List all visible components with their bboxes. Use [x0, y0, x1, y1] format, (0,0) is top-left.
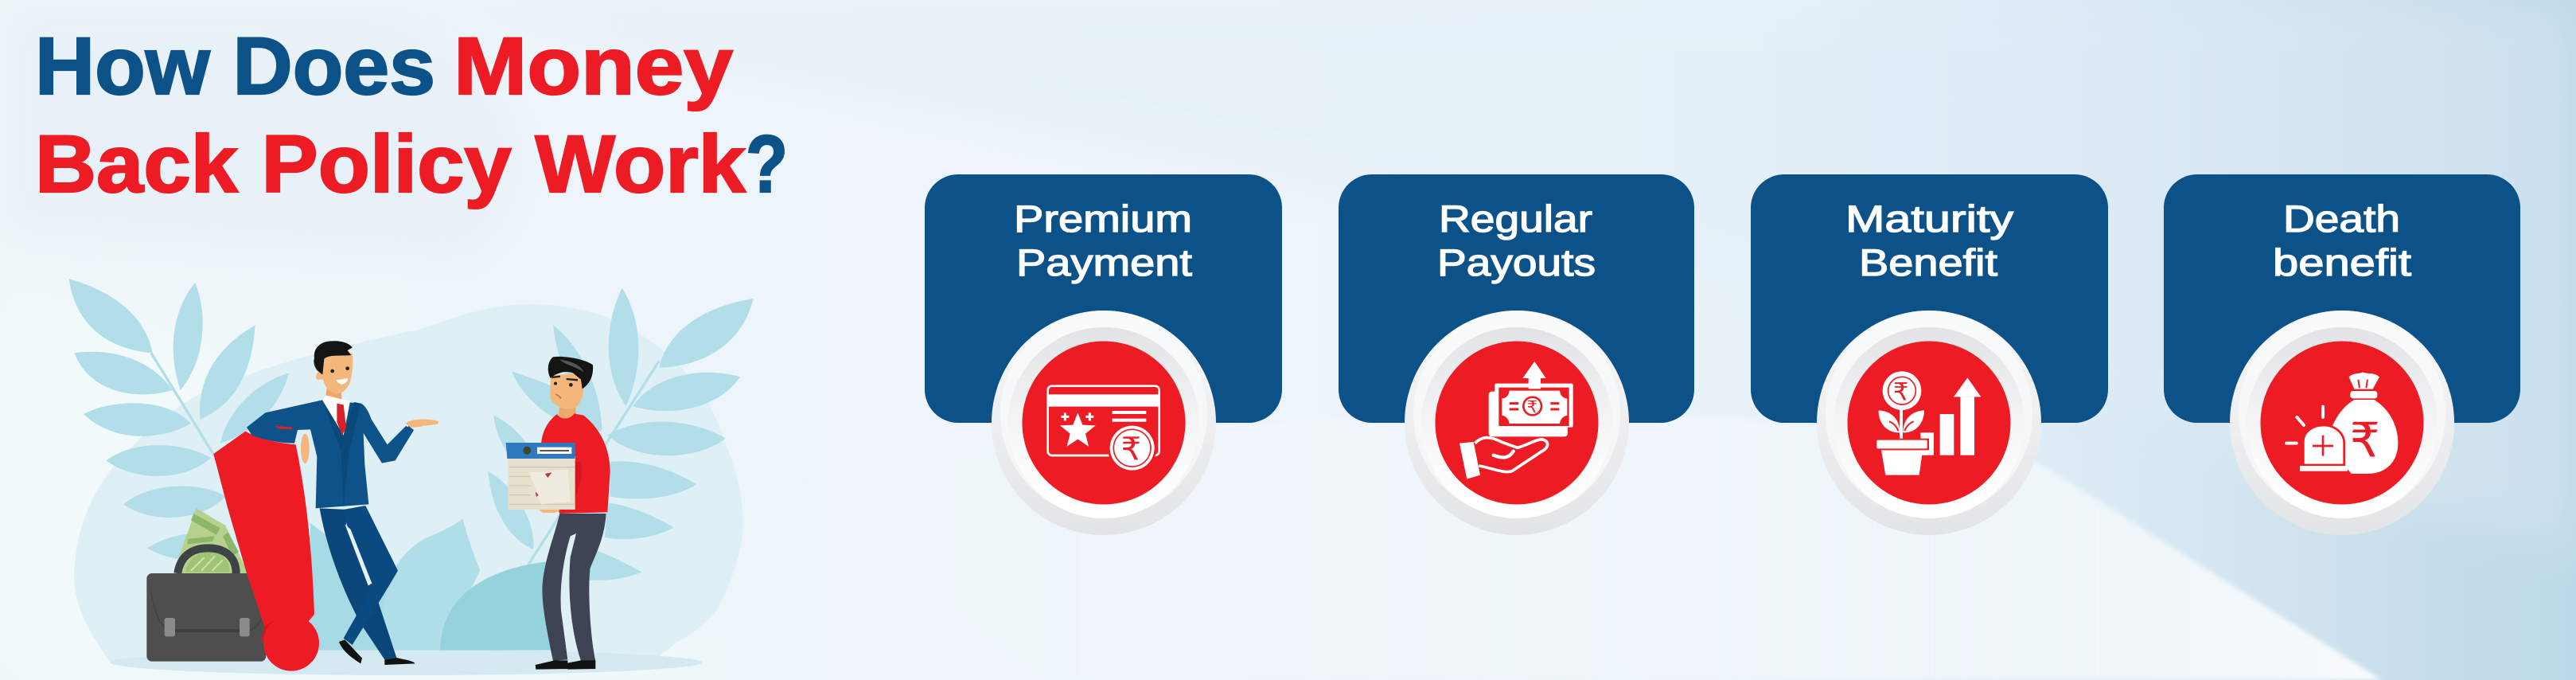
face: [551, 373, 584, 409]
blue binder top: [506, 443, 575, 459]
card background: [925, 174, 1282, 423]
card background: [2164, 174, 2520, 423]
neck and face: [325, 388, 342, 404]
backdrop blob: [74, 304, 743, 661]
shoes: [339, 639, 415, 665]
briefcase with cash: [146, 508, 266, 662]
card background: [1751, 174, 2108, 423]
pocket square: [275, 426, 292, 429]
icon: rupee plant and rising bars: ₹: [1893, 379, 1908, 407]
badge circle: [1817, 311, 2041, 535]
icon: money bag and tombstone: ₹: [2350, 412, 2380, 468]
hair: [314, 341, 353, 375]
raised hand: [406, 420, 427, 428]
step card: Maturity Benefit: [1751, 174, 2108, 535]
title line 2: ?: [746, 119, 788, 209]
neck: [559, 404, 576, 421]
badge circle: [2230, 311, 2454, 535]
icon: banknote above hand with up arrow: ₹: [1527, 397, 1537, 416]
title: [35, 21, 788, 209]
red exclamation mark: [213, 432, 319, 671]
red sweater: [541, 413, 610, 514]
card label: Payment: [1016, 241, 1192, 283]
badge circle: [1405, 311, 1629, 535]
man in blue suit: [247, 341, 427, 665]
hand under files: [537, 504, 559, 513]
right plant and shrubs: [310, 288, 754, 651]
shoes: [536, 660, 595, 670]
title line 2: Back Policy Work: [35, 119, 746, 209]
left plant: [69, 279, 289, 560]
card label: Payouts: [1437, 241, 1596, 283]
step card: Regular Payouts: [1339, 174, 1694, 535]
ground: [110, 650, 702, 675]
trousers: [320, 508, 396, 659]
man in red sweater holding files: [398, 357, 610, 670]
icon: money bag and tombstone: [2286, 372, 2398, 474]
card label: Regular: [1439, 197, 1592, 240]
card label: Benefit: [1859, 241, 1997, 283]
icon: banknote above hand with up arrow: [1459, 361, 1573, 479]
icon: card with star and rupee coin: ₹: [1121, 431, 1141, 467]
step card: Premium Payment: [925, 174, 1282, 535]
icon: card with star and rupee coin: [1048, 386, 1159, 472]
card label: [1437, 197, 1596, 283]
card background: [1339, 174, 1694, 423]
red tie: [337, 404, 346, 436]
card label: Maturity: [1845, 197, 2014, 240]
badge circle: [992, 311, 1216, 535]
face details: [554, 382, 557, 385]
suit jacket: [247, 400, 414, 508]
grey trousers: [542, 514, 606, 661]
hair: [548, 357, 593, 389]
shirt: [322, 396, 350, 436]
raised hand extension: [407, 420, 439, 426]
lower hand: [301, 434, 310, 463]
illustration: two men with exclamation mark: [69, 279, 754, 675]
icon: rupee plant and rising bars: [1875, 371, 1981, 475]
step card: Death benefit: [2164, 174, 2520, 535]
card label: Premium: [1014, 197, 1192, 240]
title line 1: Money: [454, 21, 733, 111]
card label: [2273, 197, 2411, 283]
title line 1: [35, 21, 733, 111]
card label: [1014, 197, 1192, 283]
card label: benefit: [2273, 241, 2411, 283]
card label: [1845, 197, 2014, 283]
title line 1: How Does: [35, 21, 435, 111]
card label: Death: [2283, 197, 2400, 240]
face details: [330, 369, 334, 373]
stack of files: [508, 458, 575, 510]
